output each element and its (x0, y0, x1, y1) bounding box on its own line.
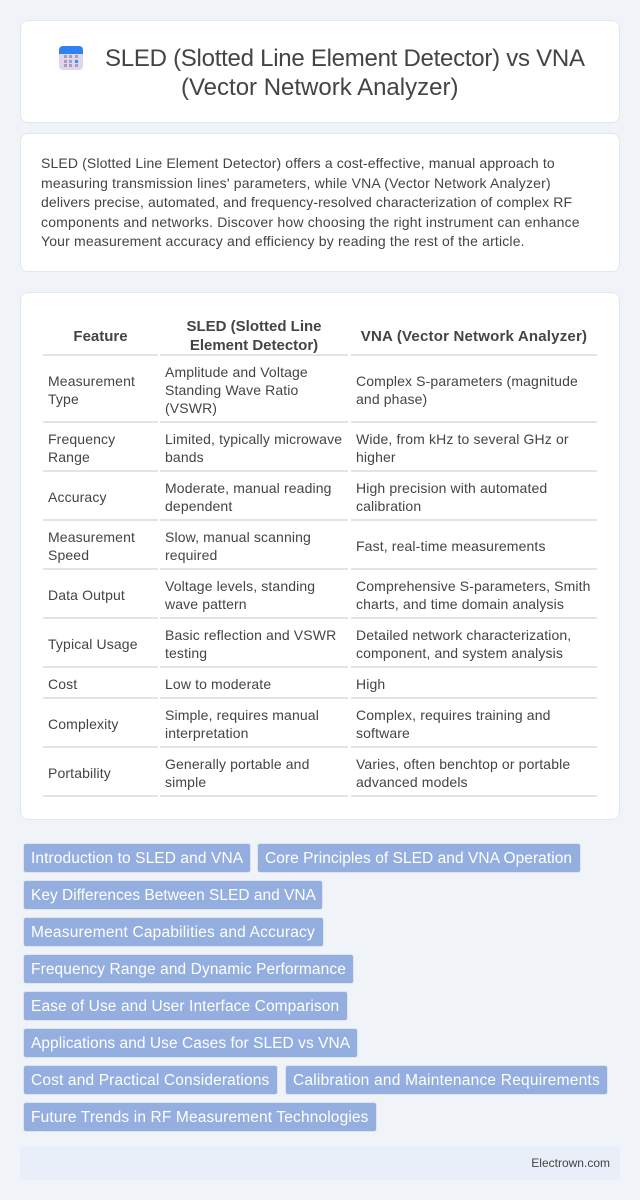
tag (23, 991, 348, 1021)
row: portability: Varies, often benchtop or portable (356, 756, 570, 772)
tag (257, 843, 581, 873)
intro text: Your measurement accuracy and efficiency by reading the rest of the article. (41, 233, 525, 249)
row: complexity (48, 707, 551, 741)
tag (23, 917, 324, 947)
row: frequency range: bands (165, 449, 204, 465)
title (105, 45, 585, 101)
row: typical usage: Detailed network characterization, (356, 627, 571, 643)
row: complexity: software (356, 725, 410, 741)
row: measurement type: Amplitude and Voltage (165, 364, 308, 380)
tag: Introduction to SLED and VNA (31, 850, 243, 867)
row: frequency range: higher (356, 449, 396, 465)
row: accuracy: dependent (165, 498, 232, 514)
row: complexity: Complex, requires training and (356, 707, 551, 723)
intro text (41, 155, 580, 249)
table header (73, 318, 587, 354)
row: accuracy: High precision with automated (356, 480, 547, 496)
tag (285, 1065, 608, 1095)
row: portability: simple (165, 774, 206, 790)
intro text panel (20, 133, 620, 272)
row: typical usage: Typical Usage (48, 636, 138, 652)
intro text: SLED (Slotted Line Element Detector) offers a cost-effective, manual approach to (41, 155, 555, 171)
tag: Ease of Use and User Interface Comparison (31, 998, 339, 1015)
title: SLED (Slotted Line Element Detector) vs VNA (105, 45, 585, 72)
tag (23, 843, 251, 873)
tag: Calibration and Maintenance Requirements (293, 1072, 600, 1089)
tag (23, 1065, 278, 1095)
row: measurement type: Measurement (48, 373, 135, 389)
row: data output: Data Output (48, 587, 125, 603)
row: frequency range (48, 431, 569, 465)
row: portability: advanced models (356, 774, 468, 790)
table header: SLED (Slotted Line (186, 318, 322, 335)
row: cost: High (356, 676, 385, 692)
row: frequency range: Range (48, 449, 90, 465)
row: measurement speed: Fast, real-time measurements (356, 538, 546, 554)
row: measurement type (48, 364, 578, 416)
row: cost (48, 676, 385, 692)
row: measurement speed: Speed (48, 547, 89, 563)
row: typical usage: Basic reflection and VSWR (165, 627, 336, 643)
row: complexity: Simple, requires manual (165, 707, 319, 723)
row: accuracy: Moderate, manual reading (165, 480, 332, 496)
title: (Vector Network Analyzer) (181, 74, 458, 101)
row: measurement type: Complex S-parameters (magnitude (356, 373, 578, 389)
row: complexity: interpretation (165, 725, 249, 741)
topic tags (23, 843, 608, 1132)
row: typical usage: testing (165, 645, 207, 661)
row: typical usage: component, and system analysis (356, 645, 563, 661)
row: measurement type: (VSWR) (165, 400, 217, 416)
tag: Key Differences Between SLED and VNA (31, 887, 316, 904)
row: typical usage (48, 627, 571, 661)
row: measurement speed: required (165, 547, 217, 563)
row: portability: Portability (48, 765, 111, 781)
row: data output (48, 578, 591, 612)
icon: calendar (59, 46, 83, 70)
row: measurement speed: Slow, manual scanning (165, 529, 311, 545)
tag: Applications and Use Cases for SLED vs VNA (31, 1035, 350, 1052)
row: measurement speed (48, 529, 546, 563)
row: measurement speed: Measurement (48, 529, 135, 545)
row: data output: Comprehensive S-parameters, Smith (356, 578, 591, 594)
row: cost: Cost (48, 676, 77, 692)
header panel (20, 20, 620, 123)
table header: VNA (Vector Network Analyzer) (361, 328, 587, 345)
row: data output: charts, and time domain analysis (356, 596, 564, 612)
tag: Cost and Practical Considerations (31, 1072, 269, 1089)
tag (23, 954, 354, 984)
row: data output: Voltage levels, standing (165, 578, 315, 594)
row: measurement type: Type (48, 391, 79, 407)
tag (23, 1028, 358, 1058)
row: data output: wave pattern (165, 596, 247, 612)
tag: Measurement Capabilities and Accuracy (31, 924, 315, 941)
intro text: components and networks. Discover how choosing the right instrument can enhance (41, 214, 580, 230)
row: accuracy: calibration (356, 498, 421, 514)
row: measurement type: Standing Wave Ratio (165, 382, 298, 398)
row: frequency range: Frequency (48, 431, 115, 447)
row: frequency range: Wide, from kHz to several GHz or (356, 431, 569, 447)
footer credit: Electrown.com (531, 1156, 610, 1170)
comparison table (43, 318, 597, 797)
tag: Future Trends in RF Measurement Technologies (31, 1109, 369, 1126)
row: portability: Generally portable and (165, 756, 310, 772)
table header: Feature (73, 328, 128, 345)
row: portability (48, 756, 570, 790)
footer bar (20, 1146, 620, 1180)
tag: Frequency Range and Dynamic Performance (31, 961, 346, 978)
table header: Element Detector) (190, 337, 318, 354)
comparison table panel (20, 292, 620, 820)
tag: Core Principles of SLED and VNA Operation (265, 850, 572, 867)
row: accuracy: Accuracy (48, 489, 107, 505)
row: cost: Low to moderate (165, 676, 271, 692)
row: measurement type: and phase) (356, 391, 427, 407)
tag (23, 1102, 377, 1132)
intro text: measuring transmission lines' parameters, while VNA (Vector Network Analyzer) (41, 174, 551, 190)
intro text: delivers precise, automated, and frequency-resolved characterization of complex RF (41, 194, 572, 210)
row: accuracy (48, 480, 547, 514)
row: frequency range: Limited, typically microwave (165, 431, 342, 447)
tag (23, 880, 323, 910)
row: complexity: Complexity (48, 716, 119, 732)
